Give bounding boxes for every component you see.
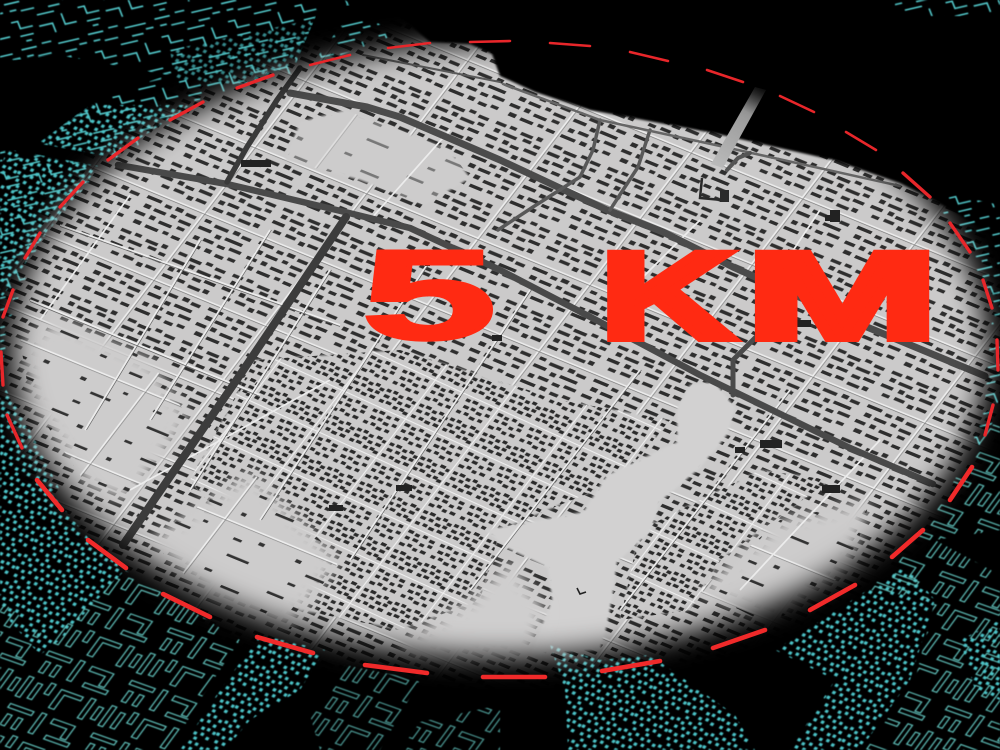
digit 5: 5 bbox=[361, 224, 497, 367]
open block: upper centre bbox=[285, 110, 470, 205]
open district: south east edge bbox=[700, 500, 870, 625]
cyan district: lower left dots bbox=[0, 480, 125, 655]
residential dot district: south east bbox=[620, 470, 830, 620]
black road: west extension bbox=[0, 142, 118, 164]
cyan district: upper block cluster bbox=[170, 20, 320, 85]
letter M: M bbox=[746, 227, 938, 365]
avenue: northwest bbox=[227, 68, 300, 182]
cyan district: south dots band bbox=[180, 635, 325, 750]
cyan district: lower left outlines bbox=[0, 570, 240, 750]
cyan district: far left bbox=[0, 380, 60, 500]
water body at top bbox=[414, 20, 966, 218]
cyan district: south outlines bbox=[310, 665, 500, 750]
cyan district: bottom right outlines bbox=[865, 420, 1000, 750]
north road bbox=[290, 93, 985, 376]
lake bed area bbox=[485, 382, 735, 655]
tower with light beam bbox=[700, 87, 766, 202]
open district: west bbox=[20, 320, 190, 500]
minor streets shadow bbox=[30, 226, 792, 610]
side dashes bbox=[1, 75, 998, 448]
small L mark on lake bed bbox=[577, 588, 586, 594]
cyan district: bottom right corner dots bbox=[960, 620, 1000, 700]
roads bbox=[118, 55, 985, 545]
cyan district: top left dense blocks bbox=[0, 105, 190, 300]
thin parallel: north bbox=[363, 55, 500, 82]
letter K: K bbox=[600, 227, 734, 365]
lake outlet clearing bbox=[400, 560, 545, 660]
avenue: southwest bbox=[123, 217, 346, 545]
cyan district: bottom right dots bbox=[775, 565, 935, 750]
residential dot district: centre bbox=[190, 350, 670, 630]
far dashes bbox=[310, 41, 876, 150]
lower main road bbox=[118, 165, 933, 484]
cyan district: top right corner bbox=[895, 0, 1000, 16]
label: 5 KM bbox=[361, 224, 938, 367]
cyan district: top left fragments bbox=[0, 0, 395, 380]
link road: east bbox=[730, 334, 755, 398]
cyan district: right edge bbox=[930, 190, 1000, 470]
black road gaps: top left bbox=[0, 5, 357, 150]
link road: north west bbox=[498, 120, 600, 230]
minor streets bbox=[30, 130, 900, 610]
open district: south west bbox=[150, 470, 340, 630]
near dashes bbox=[37, 467, 972, 677]
shoreline road bbox=[503, 84, 900, 186]
cyan district: bottom centre bbox=[550, 645, 755, 750]
tall dark buildings bbox=[241, 160, 840, 511]
curve by tower bbox=[727, 153, 750, 170]
link road: north bbox=[610, 130, 650, 210]
